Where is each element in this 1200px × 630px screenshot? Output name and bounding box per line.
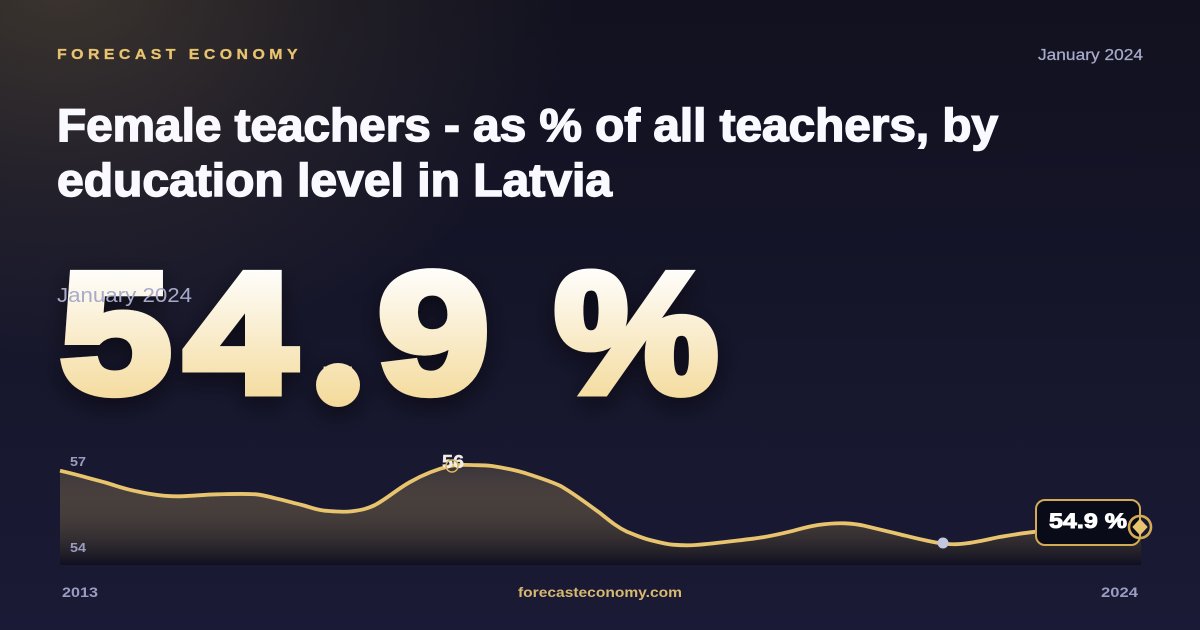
sparkline chart: [60, 452, 1151, 565]
latest value callout: 54.9 %: [1049, 510, 1127, 533]
title: Female teachers - as % of all teachers, by: [57, 99, 998, 151]
latest point marker: [1129, 516, 1151, 538]
big value: %: [555, 237, 718, 429]
source url: forecasteconomy.com: [518, 584, 682, 600]
end year: 2024: [1101, 584, 1138, 600]
y axis max label: 57: [70, 454, 86, 469]
date overlapping the value: January 2024: [57, 285, 192, 307]
start year: 2013: [62, 584, 98, 600]
latest value callout: [1036, 500, 1140, 545]
peak value label: 56: [442, 452, 464, 472]
big value: [60, 237, 718, 429]
date top right: January 2024: [1038, 47, 1143, 64]
trend line: [60, 465, 1036, 545]
title: education level in Latvia: [57, 154, 612, 206]
area under line: [60, 465, 1141, 565]
big value: 54.9: [60, 239, 489, 429]
brand eyebrow: FORECAST ECONOMY: [57, 46, 302, 63]
y axis min label: 54: [70, 540, 87, 555]
low point marker: [938, 538, 948, 548]
title: [57, 99, 998, 206]
peak marker: [446, 460, 458, 472]
